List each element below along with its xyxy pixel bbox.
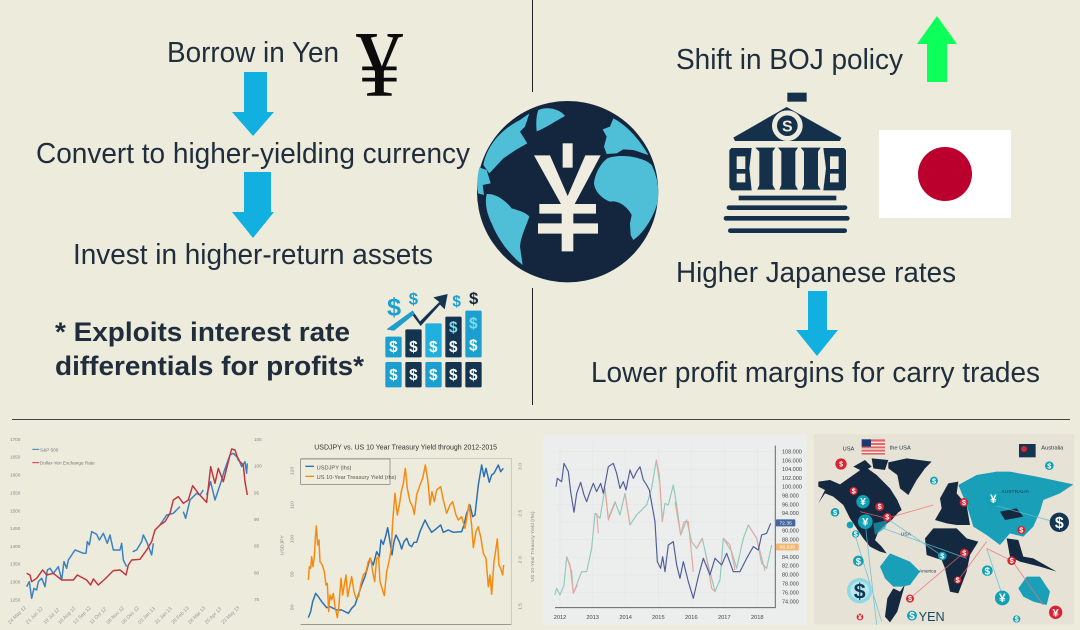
chart: S&P 500 vs dollar yen: 1300 — [10, 580, 21, 585]
chart: dual line price chart: 2018 — [751, 615, 764, 621]
chart: dual line price chart: 86.630 — [780, 545, 795, 551]
chart: S&P 500 vs dollar yen: 06 Dec 12 — [120, 605, 141, 626]
chart: S&P 500 vs dollar yen: 08 Nov 12 — [105, 605, 126, 626]
chart: dual line price chart: 88.000 — [782, 537, 799, 543]
chart: S&P 500 vs dollar yen: 23 May 13 — [220, 605, 241, 626]
map markers: $ — [839, 460, 843, 469]
chart: S&P 500 vs dollar yen: 19 Jul 12 — [43, 607, 61, 626]
chart: dual line price chart: 78.000 — [782, 582, 799, 588]
icon: rising dollar bars: $ — [389, 339, 398, 356]
chart: USDJPY vs US 10 year yield: 110 — [289, 501, 295, 509]
continents — [818, 458, 1057, 622]
map markers: $ — [1015, 614, 1019, 623]
step: higher Japanese rates: Higher Japanese rates — [676, 257, 956, 289]
chart: dual line price chart: 84.000 — [782, 555, 799, 561]
chart: S&P 500 vs dollar yen: 1400 — [10, 544, 21, 549]
map markers: $ — [940, 552, 944, 561]
chart: dual line price chart: 2013 — [586, 615, 599, 621]
chart: S&P 500 vs dollar yen: 16 Aug 12 — [57, 605, 77, 626]
map markers: $ — [962, 549, 966, 558]
icon: rising dollar bars: $ — [409, 339, 418, 356]
icon: rising dollar bars: $ — [469, 338, 478, 355]
chart: S&P 500 vs dollar yen: 1650 — [10, 455, 21, 460]
chart: dual line price chart: 94.000 — [782, 511, 799, 517]
chart: S&P 500 vs dollar yen: 28 Feb 13 — [170, 605, 191, 626]
icon: serif yen symbol: ¥ — [356, 13, 403, 117]
chart: dual line price chart: 76.000 — [782, 590, 799, 596]
icon: rising dollar bars: $ — [409, 290, 419, 309]
map markers: $ — [956, 575, 960, 584]
chart: S&P 500 vs dollar yen: 100 — [254, 464, 262, 469]
chart: S&P 500 vs dollar yen: 90 — [254, 517, 260, 522]
map markers: $ — [962, 498, 966, 507]
chart: S&P 500 vs dollar yen: 25 Apr 13 — [204, 606, 223, 626]
icon: globe with yen — [477, 101, 658, 282]
chart: USDJPY vs US 10 year yield: 90 — [289, 571, 295, 577]
chart: S&P 500 vs dollar yen: 03 Jan 13 — [137, 606, 157, 626]
map labels: AUSTRALIA — [1001, 489, 1030, 495]
chart: dual line price chart: 90.000 — [782, 529, 799, 535]
chart: dual line price chart: 102.000 — [782, 476, 802, 482]
map markers: $ — [1010, 556, 1014, 565]
chart: USDJPY vs US 10 year yield: 80 — [289, 604, 295, 610]
arrow: borrow to convert — [232, 72, 274, 136]
map labels — [843, 445, 1064, 624]
callout: interest rate differentials — [55, 317, 365, 381]
chart: USDJPY vs US 10 year yield: 100 — [289, 534, 295, 543]
chart: dual line price chart: 98.000 — [782, 494, 799, 500]
chart: dual line price chart: 104.000 — [782, 467, 802, 473]
icon: rising dollar bars: $ — [409, 367, 418, 384]
chart: S&P 500 vs dollar yen: 95 — [254, 490, 260, 495]
chart: S&P 500 vs dollar yen: 31 Jan 13 — [154, 606, 174, 626]
step: shift in BOJ policy: Shift in BOJ policy — [676, 44, 904, 76]
map markers: $ — [932, 476, 936, 485]
chart: S&P 500 vs dollar yen: 24 May 12 — [7, 605, 28, 626]
map markers: ¥ — [990, 492, 997, 506]
chart: USDJPY vs US 10 year yield: US 10-Year Treasury Yield (rhs) — [530, 511, 536, 582]
icon: rising dollar bars: $ — [387, 293, 401, 321]
map markers: $ — [1055, 515, 1064, 532]
chart: dual line price chart: 2012 — [554, 615, 566, 621]
chart: S&P 500 vs dollar yen: Dollar-Yen Exchange Rate — [40, 461, 95, 466]
map markers: $ — [1019, 525, 1023, 534]
map markers: $ — [852, 486, 856, 495]
chart: dual line price chart: 82.000 — [782, 564, 799, 570]
map markers: ¥ — [999, 591, 1006, 605]
flag: USA — [862, 439, 885, 455]
chart: dual line price chart: 74.000 — [782, 599, 799, 605]
map markers: ¥ — [862, 516, 869, 528]
map markers: $ — [833, 508, 837, 517]
arrow: convert to invest — [232, 172, 274, 238]
map labels: Australia — [1041, 446, 1064, 452]
chart: S&P 500 vs dollar yen: 21 Jun 12 — [25, 606, 45, 626]
map markers: $ — [1047, 461, 1051, 470]
chart: world map of carry flows — [814, 434, 1074, 625]
chart: USDJPY vs US 10 year yield: USDJPY vs. US 10 Year Treasury Yield through 2012-2015 — [314, 444, 497, 451]
chart: S&P 500 vs dollar yen: 1600 — [10, 473, 21, 478]
chart: dual line price chart: 2014 — [619, 615, 632, 621]
map markers: $ — [856, 556, 862, 566]
panel: BOJ policy shift — [591, 16, 1040, 389]
chart: S&P 500 vs dollar yen: 1500 — [10, 508, 21, 513]
map labels: America — [919, 568, 936, 573]
step: convert currency: Convert to higher-yielding currency — [36, 138, 471, 170]
chart: USDJPY vs US 10 year yield: 120 — [289, 466, 295, 475]
icon: rising dollar bars: $ — [429, 339, 438, 356]
map markers — [831, 458, 1069, 623]
callout: interest rate differentials: * Exploits interest rate — [55, 317, 350, 347]
chart: USDJPY vs US 10 year yield: USDJPY — [279, 535, 285, 555]
icon: rising dollar bars: $ — [469, 289, 479, 308]
map markers: $ — [854, 579, 866, 603]
chart: USDJPY vs US 10 year yield: USDJPY (lhs) — [317, 466, 352, 472]
chart: dual line price chart: 106.000 — [782, 458, 802, 464]
map labels: the USA — [890, 445, 911, 451]
map markers: ¥ — [860, 497, 866, 508]
icon: rising dollar bars: $ — [429, 367, 438, 384]
icon: rising dollar bars: $ — [452, 294, 461, 311]
chart: dual line price chart: 100.000 — [782, 485, 802, 491]
icon: green up arrow — [917, 16, 957, 82]
chart: dual line price chart — [543, 434, 807, 625]
chart: dual line price chart: 108.000 — [782, 449, 802, 455]
arrow: rates to margins — [796, 291, 838, 356]
icon: Japan flag — [879, 130, 1011, 218]
chart: dual line price chart: 80.000 — [782, 573, 799, 579]
icon: rising dollar bars: $ — [449, 320, 458, 337]
chart: S&P 500 vs dollar yen: 105 — [254, 437, 262, 442]
map markers: ¥ — [1052, 607, 1059, 619]
callout: interest rate differentials: differentials for profits* — [55, 351, 365, 381]
map labels: YEN — [919, 610, 945, 624]
map markers: $ — [909, 611, 915, 622]
chart: USDJPY vs US 10 year yield: 2.5 — [517, 510, 523, 517]
icon: rising dollar bars: $ — [469, 316, 478, 333]
icon: rising dollar bars: $ — [449, 339, 458, 356]
step: borrow in yen: Borrow in Yen — [167, 37, 339, 69]
icon: rising dollar bars: $ — [449, 367, 458, 384]
chart: dual line price chart: 2016 — [685, 615, 698, 621]
chart: S&P 500 vs dollar yen: 11 Oct 12 — [89, 606, 108, 626]
map markers: ¥ — [858, 612, 863, 621]
chart: S&P 500 vs dollar yen: 1550 — [10, 490, 21, 495]
chart: dual line price chart: 96.000 — [782, 502, 799, 508]
map labels: USA — [901, 532, 912, 538]
map markers: $ — [878, 502, 882, 511]
chart: dual line price chart: 2015 — [652, 615, 665, 621]
chart: USDJPY vs US 10 year yield: 1.5 — [517, 603, 523, 610]
map markers: $ — [885, 513, 889, 522]
step: lower profit margins: Lower profit margins for carry trades — [591, 357, 1040, 389]
chart: S&P 500 vs dollar yen: 28 Mar 13 — [187, 605, 207, 626]
chart: S&P 500 vs dollar yen: 85 — [254, 544, 260, 549]
map markers: $ — [985, 566, 991, 577]
chart: S&P 500 vs dollar yen: 1350 — [10, 562, 21, 567]
chart: USDJPY vs US 10 year yield: 3.0 — [517, 463, 523, 470]
step: invest: Invest in higher-return assets — [73, 239, 433, 271]
chart: S&P 500 vs dollar yen: 1250 — [10, 597, 21, 602]
chart: dual line price chart: 72.35 — [779, 521, 792, 527]
icon: central bank building: S — [782, 118, 793, 135]
chart: S&P 500 vs dollar yen: S&P 500 — [40, 447, 59, 452]
chart: dual line price chart: 2017 — [718, 615, 731, 621]
flag: Australia — [1019, 444, 1036, 457]
map markers: $ — [908, 594, 912, 603]
chart: USDJPY vs US 10 year yield: US 10-Year Treasury Yield (rhs) — [317, 475, 396, 481]
chart: S&P 500 vs dollar yen: 75 — [254, 597, 260, 602]
chart: USDJPY vs US 10 year yield: 2.0 — [517, 556, 523, 563]
icon: rising dollar bars: $ — [469, 367, 478, 384]
icon: central bank building — [724, 93, 850, 233]
chart: USDJPY vs US 10 year yield — [279, 444, 536, 624]
chart: S&P 500 vs dollar yen — [7, 437, 262, 626]
map labels: USA — [843, 446, 855, 452]
chart: S&P 500 vs dollar yen: 1700 — [10, 437, 21, 442]
icon: rising dollar bars: $ — [389, 367, 398, 384]
chart: S&P 500 vs dollar yen: 1450 — [10, 526, 21, 531]
map markers: $ — [854, 530, 858, 539]
chart: S&P 500 vs dollar yen: 13 Sep 12 — [72, 605, 93, 626]
chart: S&P 500 vs dollar yen: 80 — [254, 570, 260, 575]
icon: rising dollar bars — [385, 289, 482, 387]
panel: carry trade steps — [36, 13, 471, 381]
